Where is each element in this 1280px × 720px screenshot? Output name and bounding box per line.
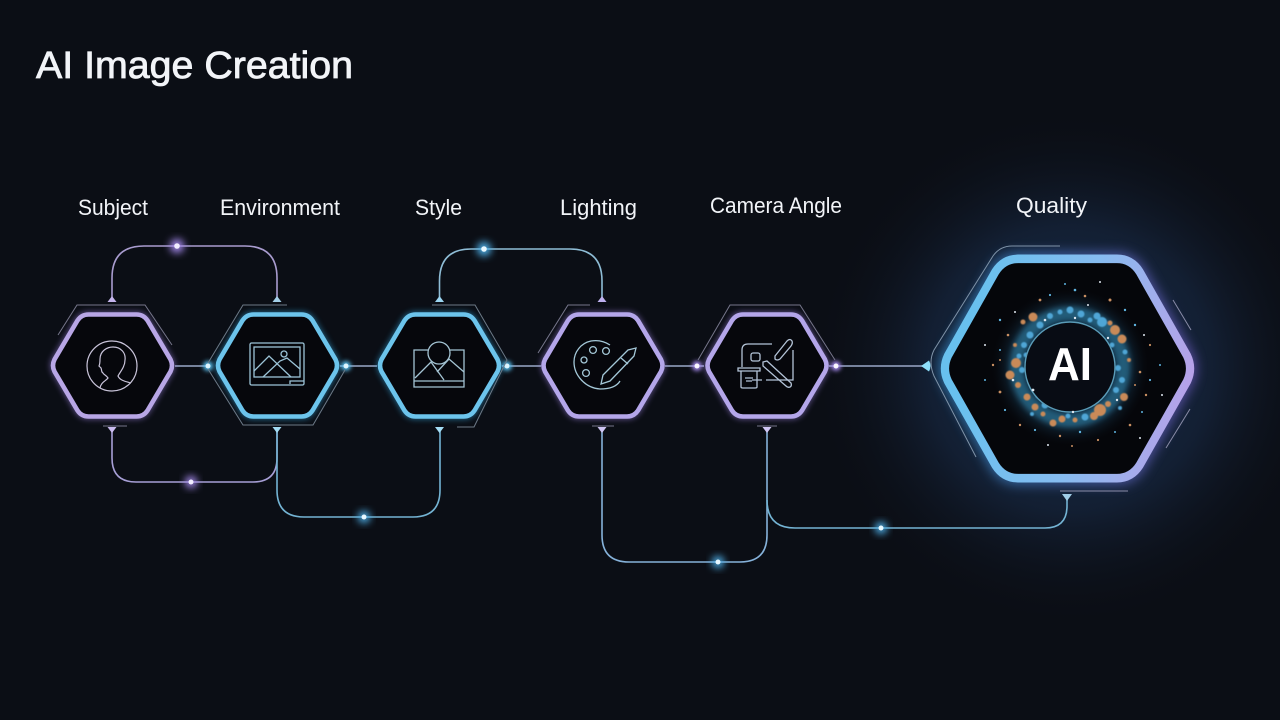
horizontal links between hexagons	[175, 360, 930, 372]
connector: Subject to Environment bottom	[108, 427, 277, 488]
label: Camera Angle: Camera Angle	[710, 193, 842, 218]
title: AI Image Creation	[36, 45, 353, 87]
icon: landscape screen	[250, 343, 304, 385]
connector: Subject to Environment top	[108, 239, 282, 302]
connector: Lighting to Camera Angle bottom	[598, 427, 772, 568]
hexagon: Style	[380, 305, 507, 427]
label: Style: Style	[415, 195, 462, 220]
small particles	[992, 295, 1151, 447]
label: Lighting: Lighting	[560, 195, 637, 220]
hexagon: Camera Angle	[698, 305, 835, 426]
blurred particle haze	[1006, 306, 1131, 426]
connector: Style to Lighting top	[435, 242, 606, 302]
hexagon: Environment	[208, 305, 345, 425]
step labels	[78, 193, 1087, 220]
connector: Camera Angle to Quality	[767, 494, 1072, 534]
label: Subject: Subject	[78, 195, 148, 220]
AI wordmark: AI	[1048, 338, 1092, 390]
icon: person	[87, 341, 137, 391]
label: Environment: Environment	[220, 195, 340, 220]
graphic: AI particle burst	[984, 281, 1163, 447]
connector: Environment to Style bottom	[272, 427, 444, 523]
hexagon: Quality	[931, 246, 1191, 491]
icon: camera and pencil	[738, 340, 793, 388]
icon: picture	[414, 342, 464, 387]
hexagon: Subject	[53, 305, 172, 426]
label: Quality: Quality	[1016, 193, 1087, 218]
hexagon: Lighting	[538, 305, 662, 426]
icon: palette and brush	[574, 341, 636, 389]
